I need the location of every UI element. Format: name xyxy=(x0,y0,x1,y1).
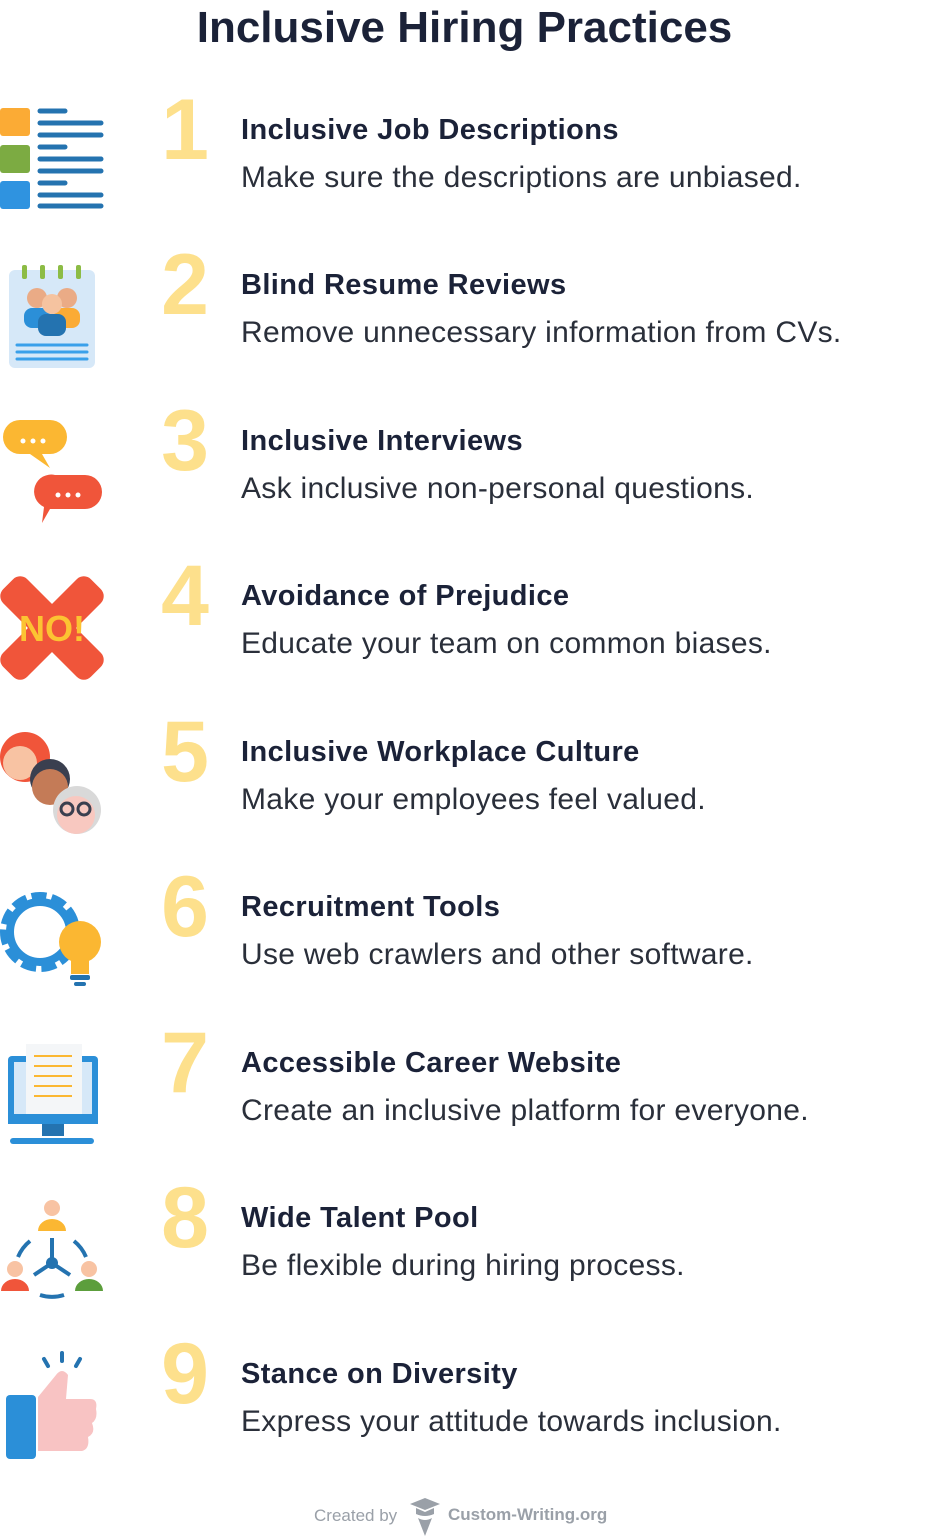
row 5 xyxy=(0,704,706,834)
icon: logo xyxy=(410,1498,440,1536)
footer credit xyxy=(314,1498,607,1536)
icon: thumbs up xyxy=(6,1351,96,1459)
row 3 xyxy=(3,393,754,523)
description: Express your attitude towards inclusion. xyxy=(241,1405,782,1438)
description: Use web crawlers and other software. xyxy=(241,938,754,971)
row 1 xyxy=(0,82,802,209)
description: Create an inclusive platform for everyone. xyxy=(241,1094,809,1127)
icon: gear and bulb xyxy=(0,892,101,986)
row 2 xyxy=(9,237,842,368)
number 3: 3 xyxy=(161,393,209,489)
description: Ask inclusive non-personal questions. xyxy=(241,472,754,505)
heading: Recruitment Tools xyxy=(241,891,500,923)
description: Make your employees feel valued. xyxy=(241,783,706,816)
description: Remove unnecessary information from CVs. xyxy=(241,316,842,349)
number 2: 2 xyxy=(161,237,209,333)
number 1: 1 xyxy=(161,82,209,178)
icon: speech bubbles xyxy=(3,420,102,523)
icon: monitor xyxy=(8,1044,98,1144)
icon: diverse people xyxy=(0,732,101,834)
icon: talent network xyxy=(1,1200,103,1299)
description: Make sure the descriptions are unbiased. xyxy=(241,161,802,194)
row 9 xyxy=(6,1326,782,1459)
heading: Inclusive Job Descriptions xyxy=(241,114,619,146)
heading: Inclusive Interviews xyxy=(241,425,523,457)
footer credit: Created by xyxy=(314,1506,397,1525)
number 7: 7 xyxy=(161,1015,209,1111)
description: Be flexible during hiring process. xyxy=(241,1249,685,1282)
icon: job description list xyxy=(0,108,104,209)
heading: Stance on Diversity xyxy=(241,1358,518,1390)
row 4 xyxy=(0,548,772,680)
description: Educate your team on common biases. xyxy=(241,627,772,660)
heading: Blind Resume Reviews xyxy=(241,269,566,301)
title: Inclusive Hiring Practices xyxy=(197,3,732,52)
icon: no prejudice: NO! xyxy=(19,608,85,649)
number 5: 5 xyxy=(161,704,209,800)
number 8: 8 xyxy=(161,1170,209,1266)
icon: resume xyxy=(9,265,95,368)
number 4: 4 xyxy=(161,548,209,644)
number 9: 9 xyxy=(161,1326,209,1422)
icon: no prejudice xyxy=(0,576,104,680)
row 7 xyxy=(8,1015,809,1144)
footer credit: Custom-Writing.org xyxy=(448,1505,607,1524)
row 8 xyxy=(1,1170,685,1299)
number 6: 6 xyxy=(161,859,209,955)
heading: Avoidance of Prejudice xyxy=(241,580,569,612)
row 6 xyxy=(0,859,754,986)
heading: Wide Talent Pool xyxy=(241,1202,479,1234)
heading: Accessible Career Website xyxy=(241,1047,621,1079)
heading: Inclusive Workplace Culture xyxy=(241,736,640,768)
